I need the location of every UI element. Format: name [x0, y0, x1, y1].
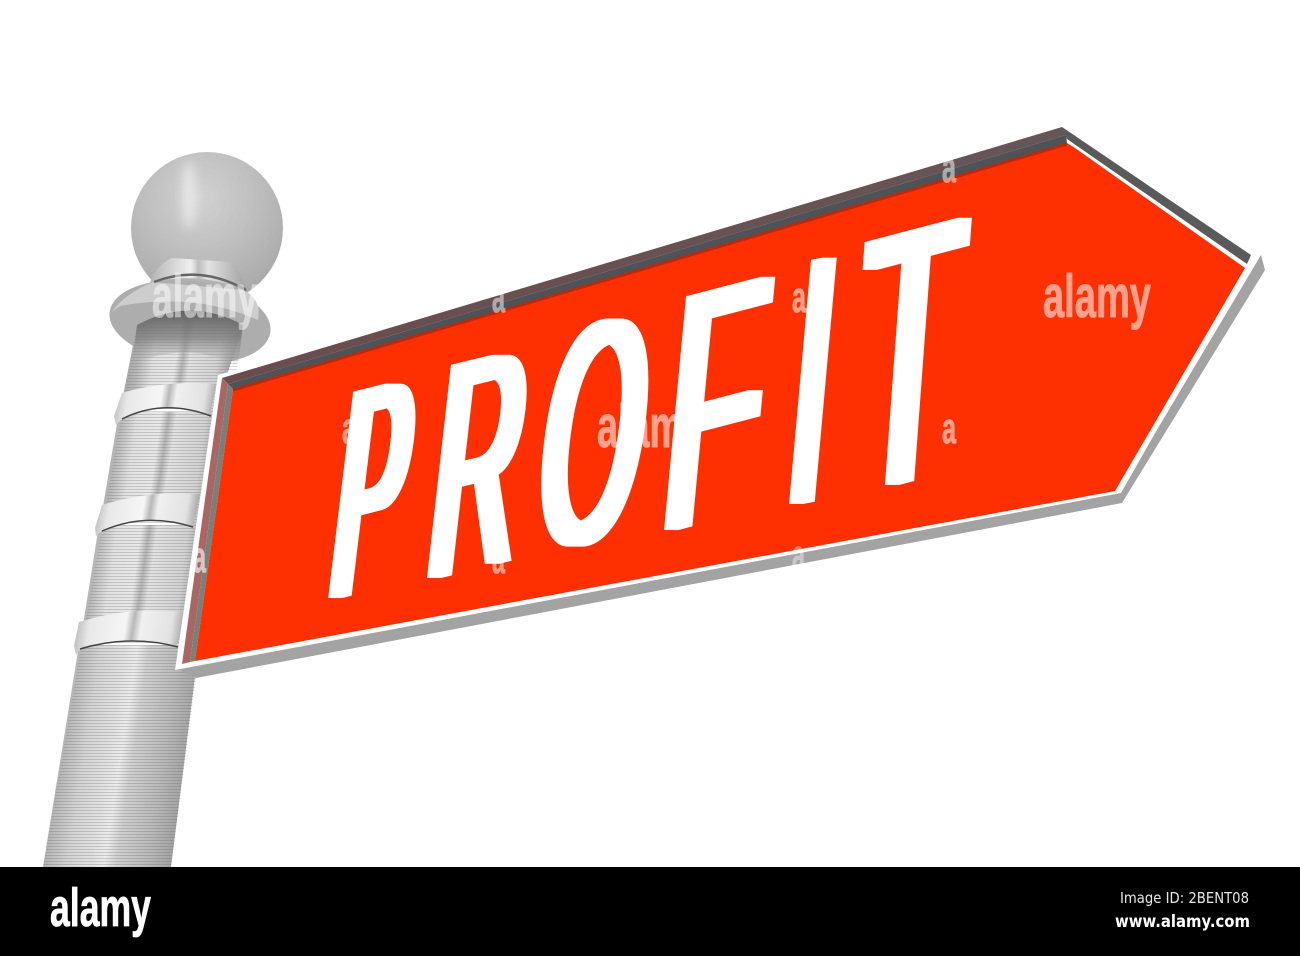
pole: second section	[99, 412, 222, 530]
watermark on sign centre: alamy	[597, 393, 704, 460]
pole: lower section	[43, 645, 199, 867]
watermarks on sign under lettering	[193, 143, 1151, 583]
letter O: O	[524, 242, 666, 624]
finial disk	[105, 271, 275, 373]
watermark fragment: a	[792, 273, 806, 322]
letter R: R	[417, 280, 542, 647]
sign left bevel outer	[182, 378, 228, 664]
letter I: I	[778, 179, 848, 582]
arrow sign	[175, 126, 1265, 678]
image id: Image ID: 2BENT08	[1120, 889, 1249, 907]
ball highlight	[182, 161, 196, 229]
watermark fragment: a	[942, 143, 956, 192]
footer bar	[0, 867, 1300, 956]
sign right bevel	[1062, 127, 1251, 264]
collar ring: lower	[74, 610, 184, 655]
middle ring edge	[102, 520, 193, 531]
sign top inner glow	[233, 144, 1067, 390]
sign top bevel outer	[222, 127, 1066, 384]
watermark fragment: a	[193, 533, 206, 582]
sign left bevel inner	[190, 384, 233, 662]
watermark fragment: a	[492, 273, 505, 322]
finial ball	[131, 152, 283, 304]
letter T: T	[843, 137, 975, 574]
footer logo: alamy	[50, 878, 151, 938]
watermark fragment: a	[492, 534, 505, 583]
pole texture	[43, 325, 243, 867]
sign underside	[176, 255, 1265, 678]
neck shadow line	[154, 275, 246, 290]
watermark fragment: a	[342, 404, 356, 453]
collar ring: middle	[95, 493, 200, 536]
letter F: F	[652, 203, 781, 606]
watermark on sign right: alamy	[1043, 263, 1151, 330]
watermark on pole: alamy	[152, 263, 258, 330]
pole: third section	[79, 525, 206, 650]
finial disk top face	[112, 282, 259, 320]
website: www.alamy.com	[1115, 912, 1250, 932]
sign white frame	[175, 126, 1255, 670]
finial neck	[150, 258, 247, 292]
watermark fragment: a	[792, 531, 805, 580]
signpost pole	[43, 152, 283, 867]
collar ring: upper	[114, 383, 216, 425]
upper ring edge	[122, 408, 211, 419]
sign word: PROFIT	[319, 137, 975, 664]
watermark fragment: a	[942, 404, 956, 453]
lower ring edge	[80, 641, 178, 649]
pole: upper section	[119, 310, 243, 416]
letter P: P	[319, 311, 428, 664]
sign red face	[195, 143, 1245, 661]
pole top shadow	[132, 310, 243, 366]
sign top bevel inner	[228, 135, 1067, 389]
